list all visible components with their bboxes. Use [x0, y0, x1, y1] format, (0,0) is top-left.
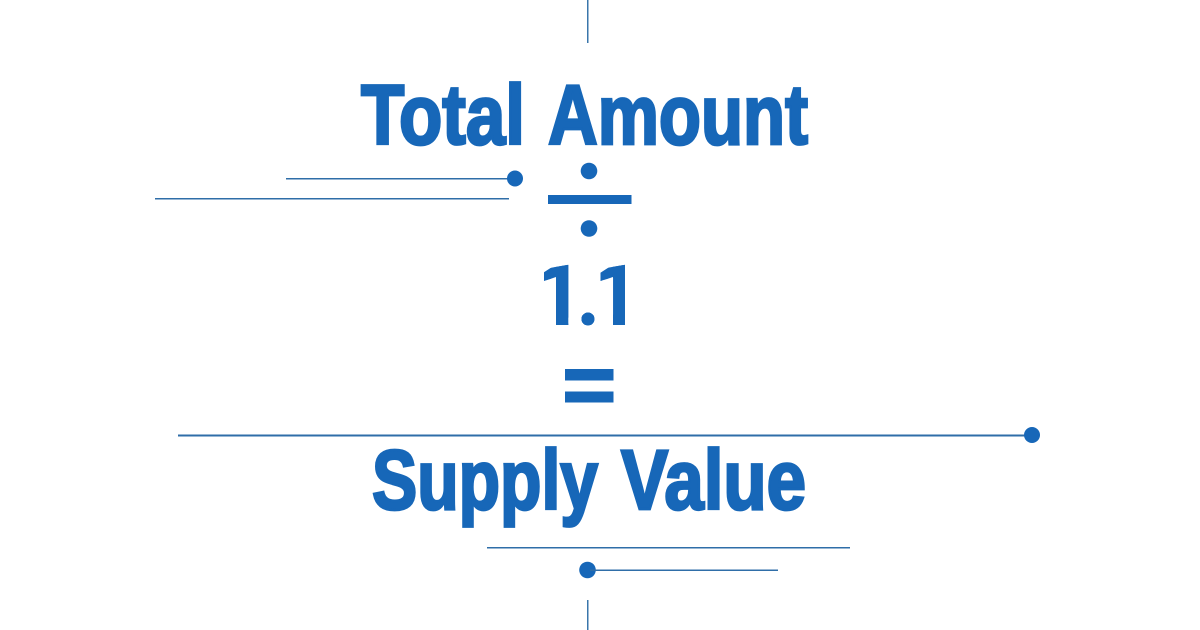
result: Supply Value: Supply [372, 433, 598, 527]
heading: Total Amount [361, 68, 808, 162]
result: Supply Value [372, 433, 806, 527]
icon: division sign [548, 163, 632, 237]
number: 1.1: 1.1 [537, 247, 643, 344]
accent line: below result [487, 547, 850, 548]
icon: equals sign [565, 369, 614, 402]
accent line with dot: lower [579, 562, 778, 578]
heading: Total Amount: Total [361, 68, 525, 162]
bottom vertical line [587, 600, 588, 630]
accent line: lower left [155, 198, 509, 200]
top vertical line [587, 0, 588, 43]
infographic: supply value formula [155, 0, 1040, 630]
result: Supply Value: Value [621, 433, 806, 527]
accent line with dot: upper left [286, 170, 523, 186]
accent line with dot: middle [178, 427, 1040, 443]
heading: Total Amount: Amount [548, 68, 808, 162]
